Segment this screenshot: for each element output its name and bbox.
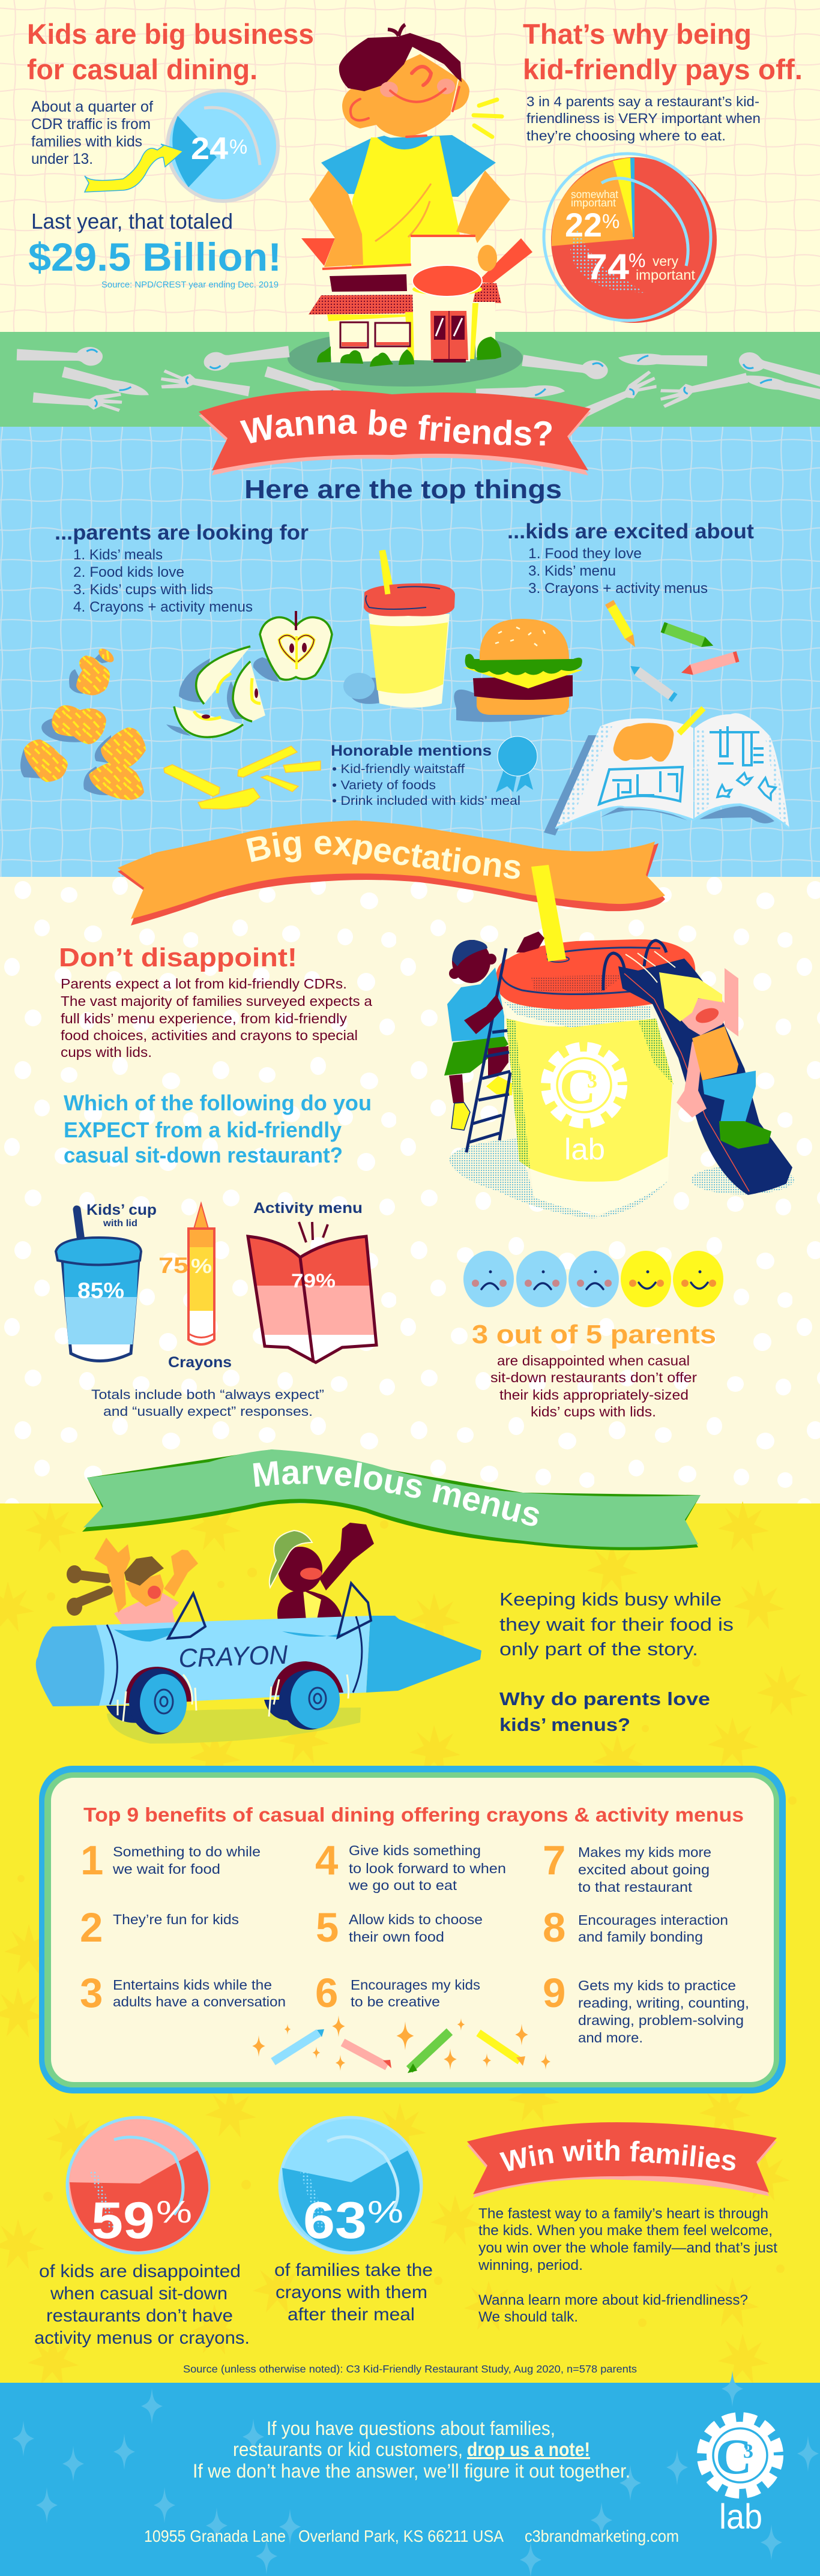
text: honorable mentions: [331, 742, 520, 808]
text: quarter of traffic: families with kids: [31, 133, 142, 150]
text: 3 in 4 parents: friendliness is VERY important when: [526, 110, 761, 126]
benefits list text: and more.: [578, 2030, 643, 2045]
text: fastest way to a family's heart: [478, 2206, 777, 2325]
text: quarter of traffic: About a quarter of: [31, 98, 153, 115]
icon: crayon car body: CRAYON: [178, 1640, 288, 1673]
text: of families take the crayons: after their meal: [288, 2305, 415, 2325]
list: kids are excited about: 3. Kids’ menu: [528, 563, 616, 579]
footer call to action: drop us a note!: [467, 2439, 590, 2460]
icon: girl on slide: [659, 968, 771, 1149]
icon: boy on ladder: [444, 931, 544, 1152]
numerals 1 to 9: 9: [543, 1970, 565, 2016]
footer call to action: [193, 2418, 630, 2482]
icon row: five faces: [463, 1251, 723, 1307]
stat: 63 percent circle: %: [367, 2195, 403, 2230]
background: yellow star section: [0, 1501, 820, 2386]
stat: 59 percent circle: %: [156, 2195, 192, 2230]
stat: 63 percent circle: 63: [303, 2192, 367, 2249]
icon: french fries: [164, 746, 321, 809]
numerals 1 to 9: 4: [315, 1837, 338, 1883]
pie chart: importance of kid friendliness: %: [629, 250, 645, 271]
logo: c3 lab footer: 3: [743, 2440, 753, 2463]
text: parents expect a lot: cups with lids.: [61, 1044, 152, 1060]
text: honorable mentions: • Drink included with kids’ meal: [332, 793, 520, 808]
chart: kids cup 85 percent: 85%: [77, 1278, 124, 1303]
numerals 1 to 9: 6: [315, 1970, 338, 2016]
benefits list text: Encourages my kids: [351, 1977, 480, 1993]
benefits list text: reading, writing, counting,: [578, 1995, 749, 2011]
list: parents are looking for: 2. Food kids love: [73, 564, 184, 580]
icon: restaurant building: [309, 235, 501, 363]
benefits list text: to that restaurant: [578, 1879, 692, 1895]
logo: c3 lab on cup: 3: [587, 1070, 597, 1092]
panel: top 9 benefits: [39, 1766, 786, 2093]
benefits list text: Entertains kids while the: [113, 1977, 272, 1993]
icon: activity book: [544, 708, 789, 835]
numerals 1 to 9: 2: [80, 1904, 103, 1951]
text: 3 in 4 parents: 3 in 4 parents say a restaurant’s kid-: [526, 94, 759, 109]
footer address: Overland Park, KS 66211 USA: [298, 2527, 504, 2545]
logo: c3 lab footer: C: [716, 2429, 752, 2485]
footer address: 10955 Granada Lane: [144, 2527, 286, 2545]
banner: big expectations: [118, 820, 665, 925]
stat: 63 percent circle: [280, 2117, 421, 2253]
note: totals include: [91, 1387, 324, 1419]
text: disappointed when casual: sit-down restaurants don’t offer: [490, 1370, 697, 1385]
heading: here are the top things: Here are the top things: [244, 475, 562, 504]
icon: giant cup: [495, 939, 695, 1214]
banner: big expectations: Big expectations: [246, 832, 520, 879]
footer call to action: restaurants or kid customers,: [233, 2439, 463, 2460]
text: 3 in 4 parents: they’re choosing where to eat.: [526, 128, 726, 143]
icon: car wheels: [106, 1669, 349, 1735]
pie chart: importance of kid friendliness: important: [636, 267, 696, 283]
heading: why being kid friendly pays off: That’s why being: [523, 18, 752, 50]
banner: marvelous menus: [82, 1449, 701, 1550]
heading: kids are big business: Kids are big business: [27, 18, 314, 50]
benefits list text: They’re fun for kids: [113, 1912, 239, 1927]
background: blue grid section: [0, 427, 820, 877]
chart: kids cup 85 percent: [56, 1202, 157, 1361]
icon: straw: [531, 865, 569, 962]
pie chart: 24 percent: [167, 91, 278, 201]
text: keeping kids busy: only part of the story.: [499, 1639, 698, 1660]
chart: kids cup 85 percent: with lid: [103, 1218, 137, 1229]
icon: crayons and sparkles: [252, 2015, 550, 2073]
pie chart: importance of kid friendliness: somewhat: [571, 188, 618, 200]
list: kids are excited about: ...kids are excited about: [507, 520, 754, 543]
footer address: c3brandmarketing.com: [525, 2527, 679, 2545]
text: honorable mentions: • Variety of foods: [332, 778, 436, 792]
text: 3 in 4 parents: [526, 94, 761, 143]
chart: crayon 75 percent: Crayons: [168, 1354, 232, 1371]
footer call to action: If you have questions about families,: [267, 2418, 555, 2439]
text: fastest way to a family's heart: The fastest way to a family’s heart is through: [478, 2206, 768, 2222]
icon: chicken nuggets: [20, 646, 146, 800]
pie chart: importance of kid friendliness: %: [602, 210, 620, 232]
text: honorable mentions: Honorable mentions: [331, 742, 492, 759]
benefits list text: Give kids something: [349, 1843, 481, 1858]
chart: crayon 75 percent: [158, 1203, 232, 1371]
heading: top 9 benefits: Top 9 benefits of casual dining offering crayons & activity menus: [83, 1804, 744, 1826]
heading: which of the following: [64, 1091, 372, 1167]
banner: marvelous menus: Marvelous menus: [253, 1461, 539, 1526]
text: parents expect a lot: food choices, activities and crayons to special: [61, 1028, 358, 1043]
arrow: yellow pointer to pie: [85, 144, 183, 192]
text: keeping kids busy: [499, 1589, 734, 1735]
heading: which of the following: EXPECT from a kid-friendly: [64, 1118, 342, 1142]
list: kids are excited about: [507, 520, 754, 597]
text: keeping kids busy: kids’ menus?: [499, 1714, 630, 1735]
heading: kids are big business: [27, 18, 314, 85]
chart: crayon 75 percent: 75: [158, 1253, 188, 1278]
numerals 1 to 9: 3: [80, 1970, 103, 2016]
stat: 3 out of 5 parents: 3 out of 5 parents: [472, 1320, 716, 1349]
footer call to action: If we don’t have the answer, we’ll figure it out together.: [193, 2460, 630, 2482]
banner: win with families: Win with families: [499, 2139, 736, 2171]
illustration: giant cup with kids and slide: [444, 865, 794, 1218]
stat: 59 percent circle: 59: [91, 2192, 155, 2249]
list: parents are looking for: 3. Kids’ cups with lids: [73, 582, 213, 598]
text: fastest way to a family's heart: Wanna learn more about kid-friendliness?: [478, 2292, 748, 2308]
text: keeping kids busy: Why do parents love: [499, 1688, 710, 1709]
text: of families take the crayons: [274, 2260, 433, 2325]
list: kids are excited about: 1. Food they love: [528, 546, 642, 562]
logo: c3 lab footer: [703, 2418, 777, 2536]
icon: bushes: [317, 337, 501, 367]
icon: burger: [454, 619, 583, 722]
benefits list text: [112, 1843, 749, 2045]
icon: award ribbon: [496, 736, 537, 792]
chart: kids cup 85 percent: Kids’ cup: [86, 1202, 157, 1218]
icon: crayon car body: [36, 1583, 481, 1706]
heading: dont disappoint: Don’t disappoint!: [59, 943, 297, 972]
table shadow under restaurant: [288, 330, 523, 387]
heading: which of the following: Which of the following do you: [64, 1091, 372, 1115]
icon: loose crayons: [605, 600, 740, 702]
heading: kids are big business: for casual dining.: [27, 53, 258, 85]
benefits list text: adults have a conversation: [113, 1994, 286, 2009]
list: parents are looking for: ...parents are looking for: [55, 521, 309, 544]
text: keeping kids busy: they wait for their food is: [499, 1614, 734, 1635]
icon: slide: [603, 940, 792, 1195]
note: totals include: Totals include both “always expect”: [91, 1387, 324, 1402]
text: last year that totaled: Last year, that totaled: [31, 209, 233, 233]
stat: 59 percent circle: [67, 2117, 209, 2253]
numerals 1 to 9: 7: [543, 1837, 565, 1883]
benefits list text: excited about going: [578, 1862, 710, 1877]
benefits list text: their own food: [349, 1929, 444, 1945]
text: of kids are disappointed: when casual sit-down: [50, 2284, 228, 2304]
numerals 1 to 9: [80, 1837, 565, 2016]
pie chart: importance of kid friendliness: important: [571, 197, 616, 209]
text: parents expect a lot: [61, 976, 373, 1060]
benefits list text: Encourages interaction: [578, 1912, 728, 1928]
chart: activity menu 79 percent: Activity menu: [253, 1200, 363, 1217]
banner: win with families: [467, 2122, 777, 2198]
chart: activity menu 79 percent: 79%: [291, 1270, 336, 1292]
benefits list text: we go out to eat: [348, 1877, 457, 1893]
text: disappointed when casual: [490, 1353, 697, 1419]
icon: girl passenger: [67, 1538, 198, 1636]
list: parents are looking for: 1. Kids’ meals: [73, 547, 163, 563]
text: parents expect a lot: Parents expect a lot from kid-friendly CDRs.: [61, 976, 347, 992]
background: green table band: [0, 332, 820, 427]
text: disappointed when casual: kids’ cups with lids.: [531, 1404, 656, 1419]
chart: activity menu 79 percent: [248, 1200, 376, 1362]
list: parents are looking for: 4. Crayons + activity menus: [73, 599, 253, 615]
heading: which of the following: casual sit-down restaurant?: [64, 1143, 343, 1167]
cutlery pattern on table: [17, 343, 820, 423]
pie chart: importance of kid friendliness: 74: [586, 247, 630, 287]
numerals 1 to 9: 5: [316, 1904, 339, 1951]
text: of kids are disappointed: restaurants don’t have: [46, 2306, 233, 2326]
background: polka dot section: [0, 877, 820, 1503]
source note: Source: NPD/CREST year ending Dec. 2019: [101, 280, 279, 290]
text: of kids are disappointed: [34, 2262, 250, 2348]
text: fastest way to a family's heart: you win over the whole family—and that’s just: [478, 2240, 777, 2256]
benefits list text: to look forward to when: [349, 1861, 506, 1876]
text: honorable mentions: • Kid-friendly waitstaff: [332, 762, 465, 776]
icon: boy driver: [270, 1523, 374, 1633]
stat: 29.5 billion: $29.5 Billion!: [28, 235, 282, 279]
pie chart: 24 percent: %: [229, 136, 247, 158]
text: of kids are disappointed: of kids are disappointed: [39, 2262, 241, 2281]
benefits list text: drawing, problem-solving: [578, 2012, 744, 2028]
text: of kids are disappointed: activity menus or crayons.: [34, 2328, 250, 2348]
text: quarter of traffic: CDR traffic is from: [31, 116, 151, 133]
benefits list text: we wait for food: [112, 1861, 220, 1877]
illustration: crayon car with kids: [36, 1523, 481, 1744]
text: of families take the crayons: of families take the: [274, 2260, 433, 2280]
footer address: [144, 2527, 679, 2545]
text: keeping kids busy: Keeping kids busy while: [499, 1589, 722, 1610]
banner: wanna be friends: [199, 390, 591, 475]
text: fastest way to a family's heart: winning, period.: [478, 2257, 583, 2274]
text: fastest way to a family's heart: the kids. When you make them feel welcome,: [478, 2222, 773, 2239]
list: parents are looking for: [55, 521, 309, 615]
text: parents expect a lot: full kids’ menu experience, from kid-friendly: [61, 1011, 347, 1026]
heading: why being kid friendly pays off: kid-friendly pays off.: [523, 53, 803, 85]
logo: c3 lab on cup: lab: [564, 1133, 605, 1166]
chart: crayon 75 percent: %: [191, 1255, 212, 1278]
banner: wanna be friends: Wanna be friends?: [240, 409, 552, 445]
text: quarter of traffic: [31, 98, 153, 167]
text: of families take the crayons: crayons with them: [276, 2283, 427, 2302]
numerals 1 to 9: 8: [543, 1904, 565, 1951]
benefits list text: to be creative: [351, 1994, 440, 2009]
icon: red flaps behind building: [301, 238, 532, 283]
text: parents expect a lot: The vast majority of families surveyed expects a: [61, 993, 373, 1009]
benefits list text: and family bonding: [578, 1929, 703, 1945]
note: totals include: and “usually expect” responses.: [103, 1404, 313, 1419]
logo: c3 lab on cup: [547, 1048, 621, 1166]
pie chart: importance of kid friendliness: very: [653, 253, 678, 269]
numerals 1 to 9: 1: [80, 1837, 103, 1883]
illustration: boy holding restaurant: [301, 25, 532, 367]
text: fastest way to a family's heart: We should talk.: [478, 2309, 578, 2325]
text: disappointed when casual: their kids appropriately-sized: [499, 1387, 689, 1403]
list: kids are excited about: 3. Crayons + activity menus: [528, 580, 708, 597]
pie chart: importance of kid friendliness: [544, 154, 717, 323]
benefits list text: Allow kids to choose: [349, 1912, 483, 1927]
pie chart: importance of kid friendliness: 22: [565, 206, 602, 244]
icon: apple half and slices: [166, 611, 332, 737]
benefits list text: Something to do while: [113, 1844, 261, 1859]
text: disappointed when casual: are disappointed when casual: [497, 1353, 690, 1368]
logo: c3 lab footer: lab: [719, 2497, 762, 2536]
logo: c3 lab on cup: C: [559, 1059, 596, 1115]
benefits list text: Gets my kids to practice: [578, 1978, 736, 1993]
text: quarter of traffic: under 13.: [31, 151, 93, 167]
source note: Source (unless otherwise noted): C3 Kid-Friendly Restaurant Study, Aug 2020, n=578 parents: [183, 2363, 637, 2375]
icon: drink cup: [343, 550, 455, 708]
benefits list text: Makes my kids more: [578, 1844, 711, 1860]
background: blue footer: [0, 2371, 820, 2576]
background: cream grid section: [0, 0, 820, 332]
pie chart: 24 percent: 24: [191, 131, 228, 166]
heading: why being kid friendly pays off: [523, 18, 803, 85]
